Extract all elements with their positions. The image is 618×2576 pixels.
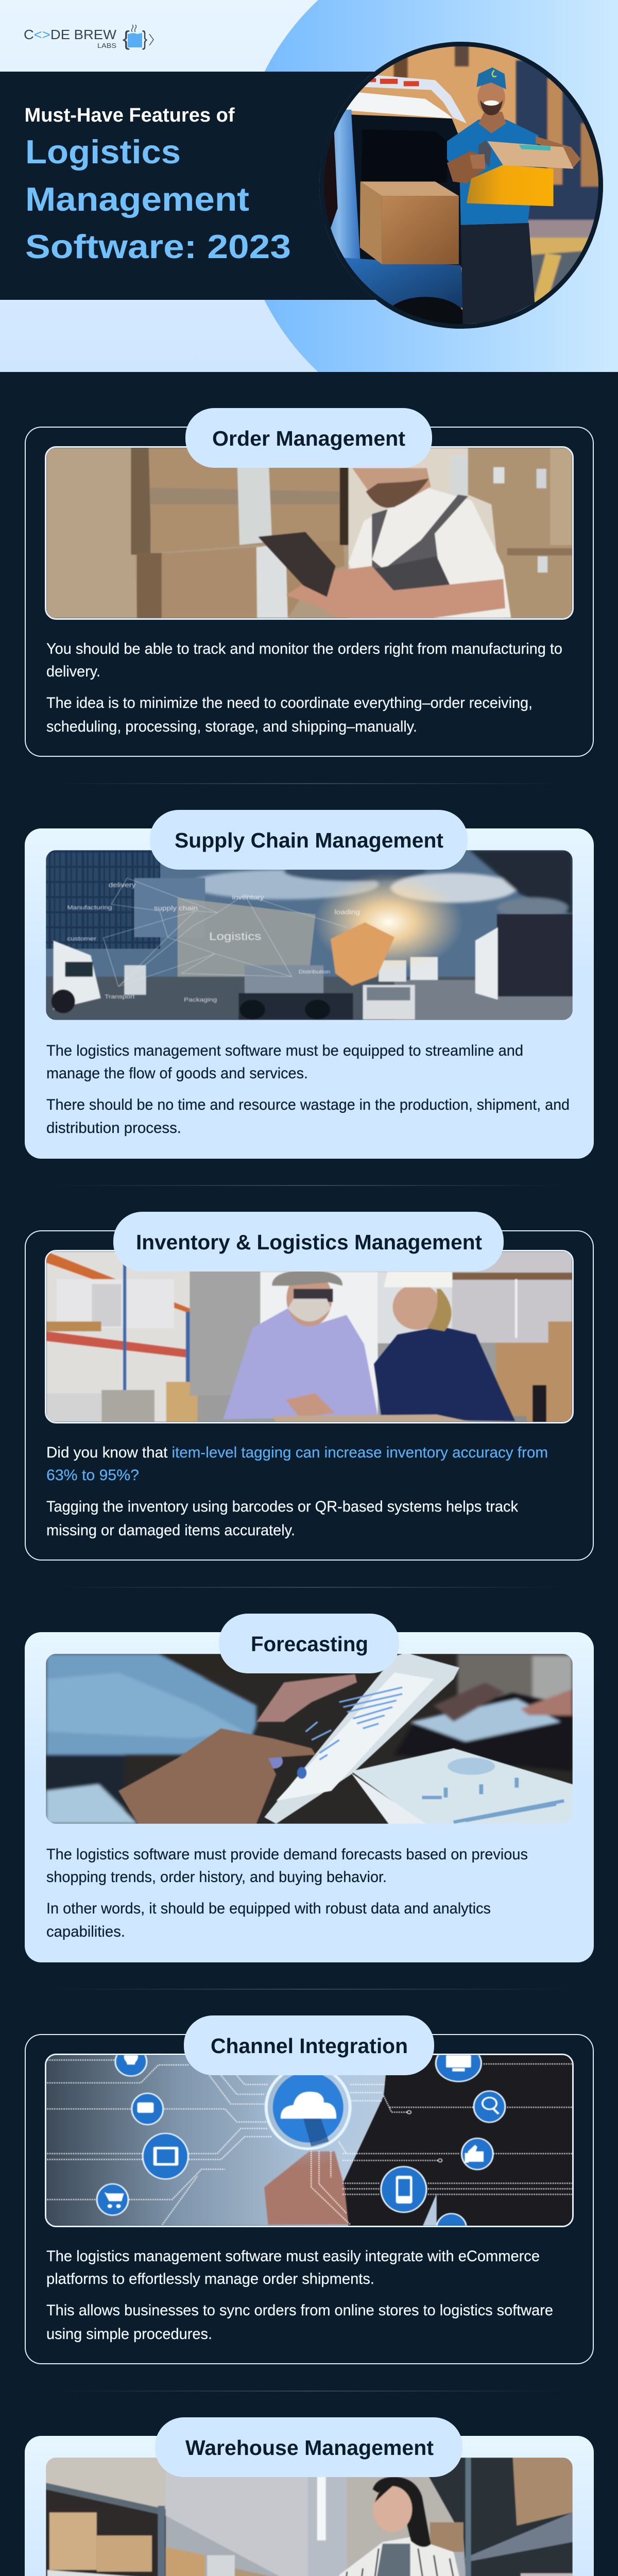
body text: The logistics management software must be equipped to streamline and (46, 1042, 523, 1059)
body text with highlighted statistic (46, 1444, 548, 1539)
body text: using simple procedures. (46, 2326, 212, 2343)
body text with highlighted statistic: Did you know that item-level tagging can increase inventory accuracy from (46, 1444, 548, 1461)
body text: This allows businesses to sync orders from online stores to logistics software (46, 2302, 553, 2319)
body text: The idea is to minimize the need to coordinate everything–order receiving, (46, 694, 533, 711)
logo: Code Brew Labs: C<>DE BREW (24, 27, 116, 42)
body text (46, 2248, 553, 2343)
heading pill: Inventory & Logistics Management: Inventory & Logistics Management (136, 1230, 482, 1254)
heading pill: Forecasting: Forecasting (251, 1632, 368, 1656)
photo: woman with tablet in warehouse aisle (46, 2458, 573, 2576)
hero title (25, 105, 291, 265)
logo: Code Brew Labs: } (142, 27, 147, 50)
panel: warehouse management (25, 2436, 594, 2576)
hero photo: delivery man with van and boxes (319, 42, 603, 329)
heading pill: Inventory & Logistics Management (113, 1212, 504, 1272)
hero title: Management (25, 180, 249, 218)
photo: logistics network over trucks and handshake: Logistics (209, 930, 261, 943)
hero title: Logistics (25, 133, 181, 171)
body text: manage the flow of goods and services. (46, 1065, 308, 1082)
panel: inventory and logistics management (25, 1230, 594, 1561)
heading pill: Channel Integration: Channel Integration (211, 2034, 408, 2058)
body text with highlighted statistic: Tagging the inventory using barcodes or QR-based systems helps track (46, 1498, 519, 1515)
body text with highlighted statistic: missing or damaged items accurately. (46, 1522, 295, 1539)
photo: logistics network over trucks and handshake: Distribution (299, 969, 330, 975)
panel: channel integration (25, 2034, 594, 2364)
photo: logistics network over trucks and handshake: Transport (105, 993, 135, 1000)
photo: logistics network over trucks and handshake: Manufacturing (67, 904, 112, 911)
photo: logistics network over trucks and handshake: Packaging (184, 996, 217, 1003)
photo: logistics network over trucks and handshake: loading (335, 908, 360, 916)
body text: shopping trends, order history, and buying behavior. (46, 1869, 387, 1886)
heading pill: Forecasting (219, 1614, 399, 1673)
body text: The logistics software must provide demand forecasts based on previous (46, 1846, 528, 1863)
dark title band (0, 72, 464, 300)
photo: logistics network over trucks and handshake (46, 850, 573, 1020)
body text: delivery. (46, 663, 100, 680)
photo: logistics network over trucks and handshake: customer (67, 936, 97, 942)
photo: worker with tablet beside cardboard boxes (45, 446, 574, 620)
body text: platforms to effortlessly manage order shipments. (46, 2270, 374, 2287)
body text (46, 1846, 528, 1940)
photo: finger touching cloud with connected app icons (45, 2054, 574, 2227)
heading pill: Warehouse Management: Warehouse Management (185, 2436, 434, 2460)
panel: supply chain management (25, 828, 594, 1159)
body text (46, 640, 562, 735)
decorative blue circle (237, 0, 618, 440)
body text: distribution process. (46, 1120, 181, 1137)
body text: There should be no time and resource wastage in the production, shipment, and (46, 1096, 570, 1113)
body text: scheduling, processing, storage, and shipping–manually. (46, 718, 417, 735)
heading pill: Order Management (185, 408, 432, 468)
body text: You should be able to track and monitor the orders right from manufacturing to (46, 640, 562, 657)
body text: The logistics management software must easily integrate with eCommerce (46, 2248, 540, 2265)
hero section (0, 0, 618, 372)
panel: forecasting (25, 1632, 594, 1962)
heading pill: Channel Integration (184, 2015, 434, 2075)
body text: In other words, it should be equipped with robust data and analytics (46, 1900, 491, 1917)
logo: Code Brew Labs: LABS (97, 42, 116, 49)
photo: hands using tablet with charts (46, 1654, 573, 1824)
photo: two colleagues checking inventory in a warehouse (45, 1250, 574, 1423)
photo: logistics network over trucks and handshake: inventory (232, 893, 265, 901)
photo: logistics network over trucks and handshake: supply chain (154, 904, 198, 912)
panel: order management (25, 427, 594, 757)
heading pill: Warehouse Management (155, 2417, 462, 2477)
hero title: Software: 2023 (25, 228, 291, 265)
body text (46, 1042, 570, 1137)
logo: Code Brew Labs (24, 25, 154, 50)
body text with highlighted statistic: 63% to 95%? (46, 1467, 139, 1484)
photo: logistics network over trucks and handshake: delivery (109, 881, 136, 889)
photo ring (319, 42, 603, 329)
body text: capabilities. (46, 1923, 125, 1940)
heading pill: Order Management: Order Management (212, 427, 405, 450)
hero title: Must-Have Features of (25, 105, 235, 126)
logo: Code Brew Labs: { (123, 27, 130, 50)
heading pill: Supply Chain Management (150, 810, 468, 870)
heading pill: Supply Chain Management: Supply Chain Management (175, 828, 443, 852)
